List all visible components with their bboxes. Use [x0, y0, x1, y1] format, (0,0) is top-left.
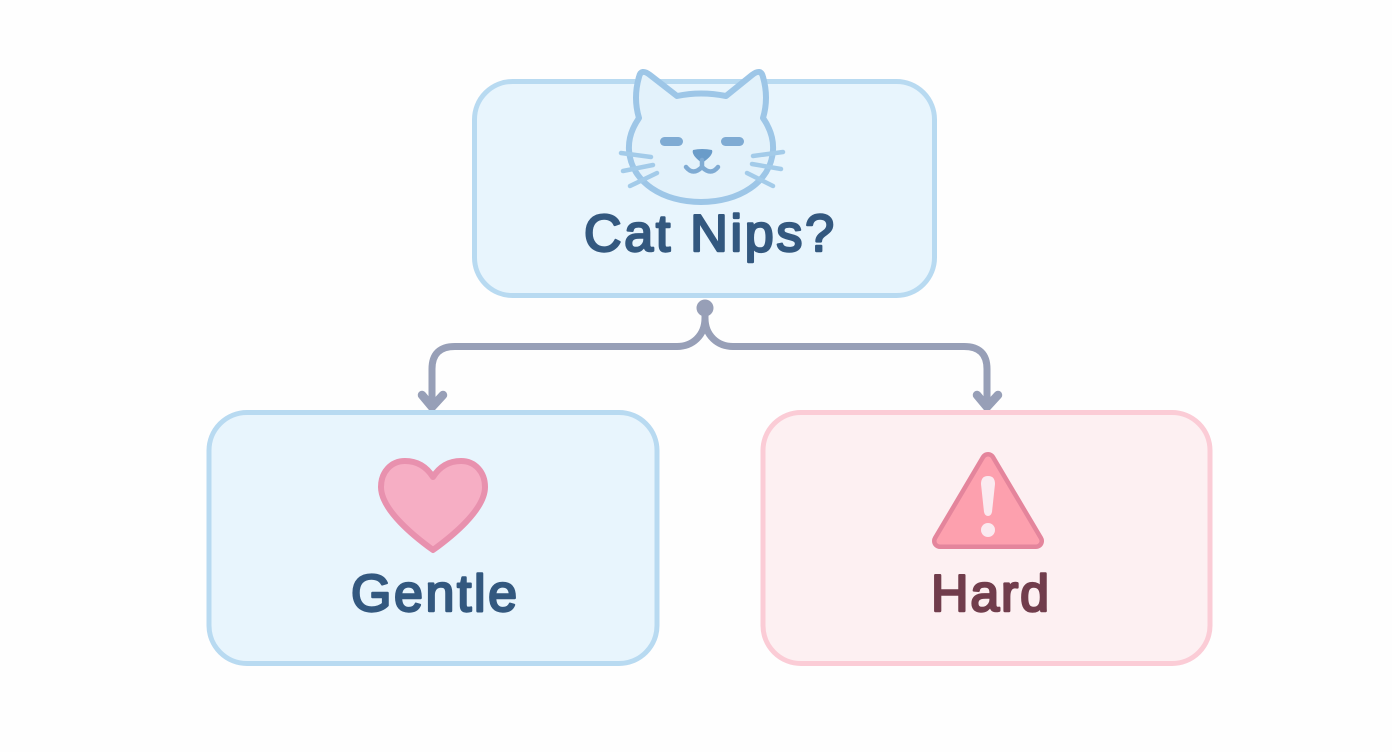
label: Hard: Hard	[931, 565, 1049, 623]
icon: cat face	[621, 72, 783, 202]
arrows: branching connector	[422, 300, 998, 407]
panel: cat nips question	[474, 72, 934, 296]
icon: warning triangle	[940, 460, 1036, 541]
heading: Cat Nips?: Cat Nips?	[584, 205, 834, 263]
label: Gentle: Gentle	[351, 565, 517, 623]
icon: heart	[381, 461, 485, 550]
panel: hard	[763, 412, 1210, 664]
panel: gentle	[209, 412, 657, 664]
